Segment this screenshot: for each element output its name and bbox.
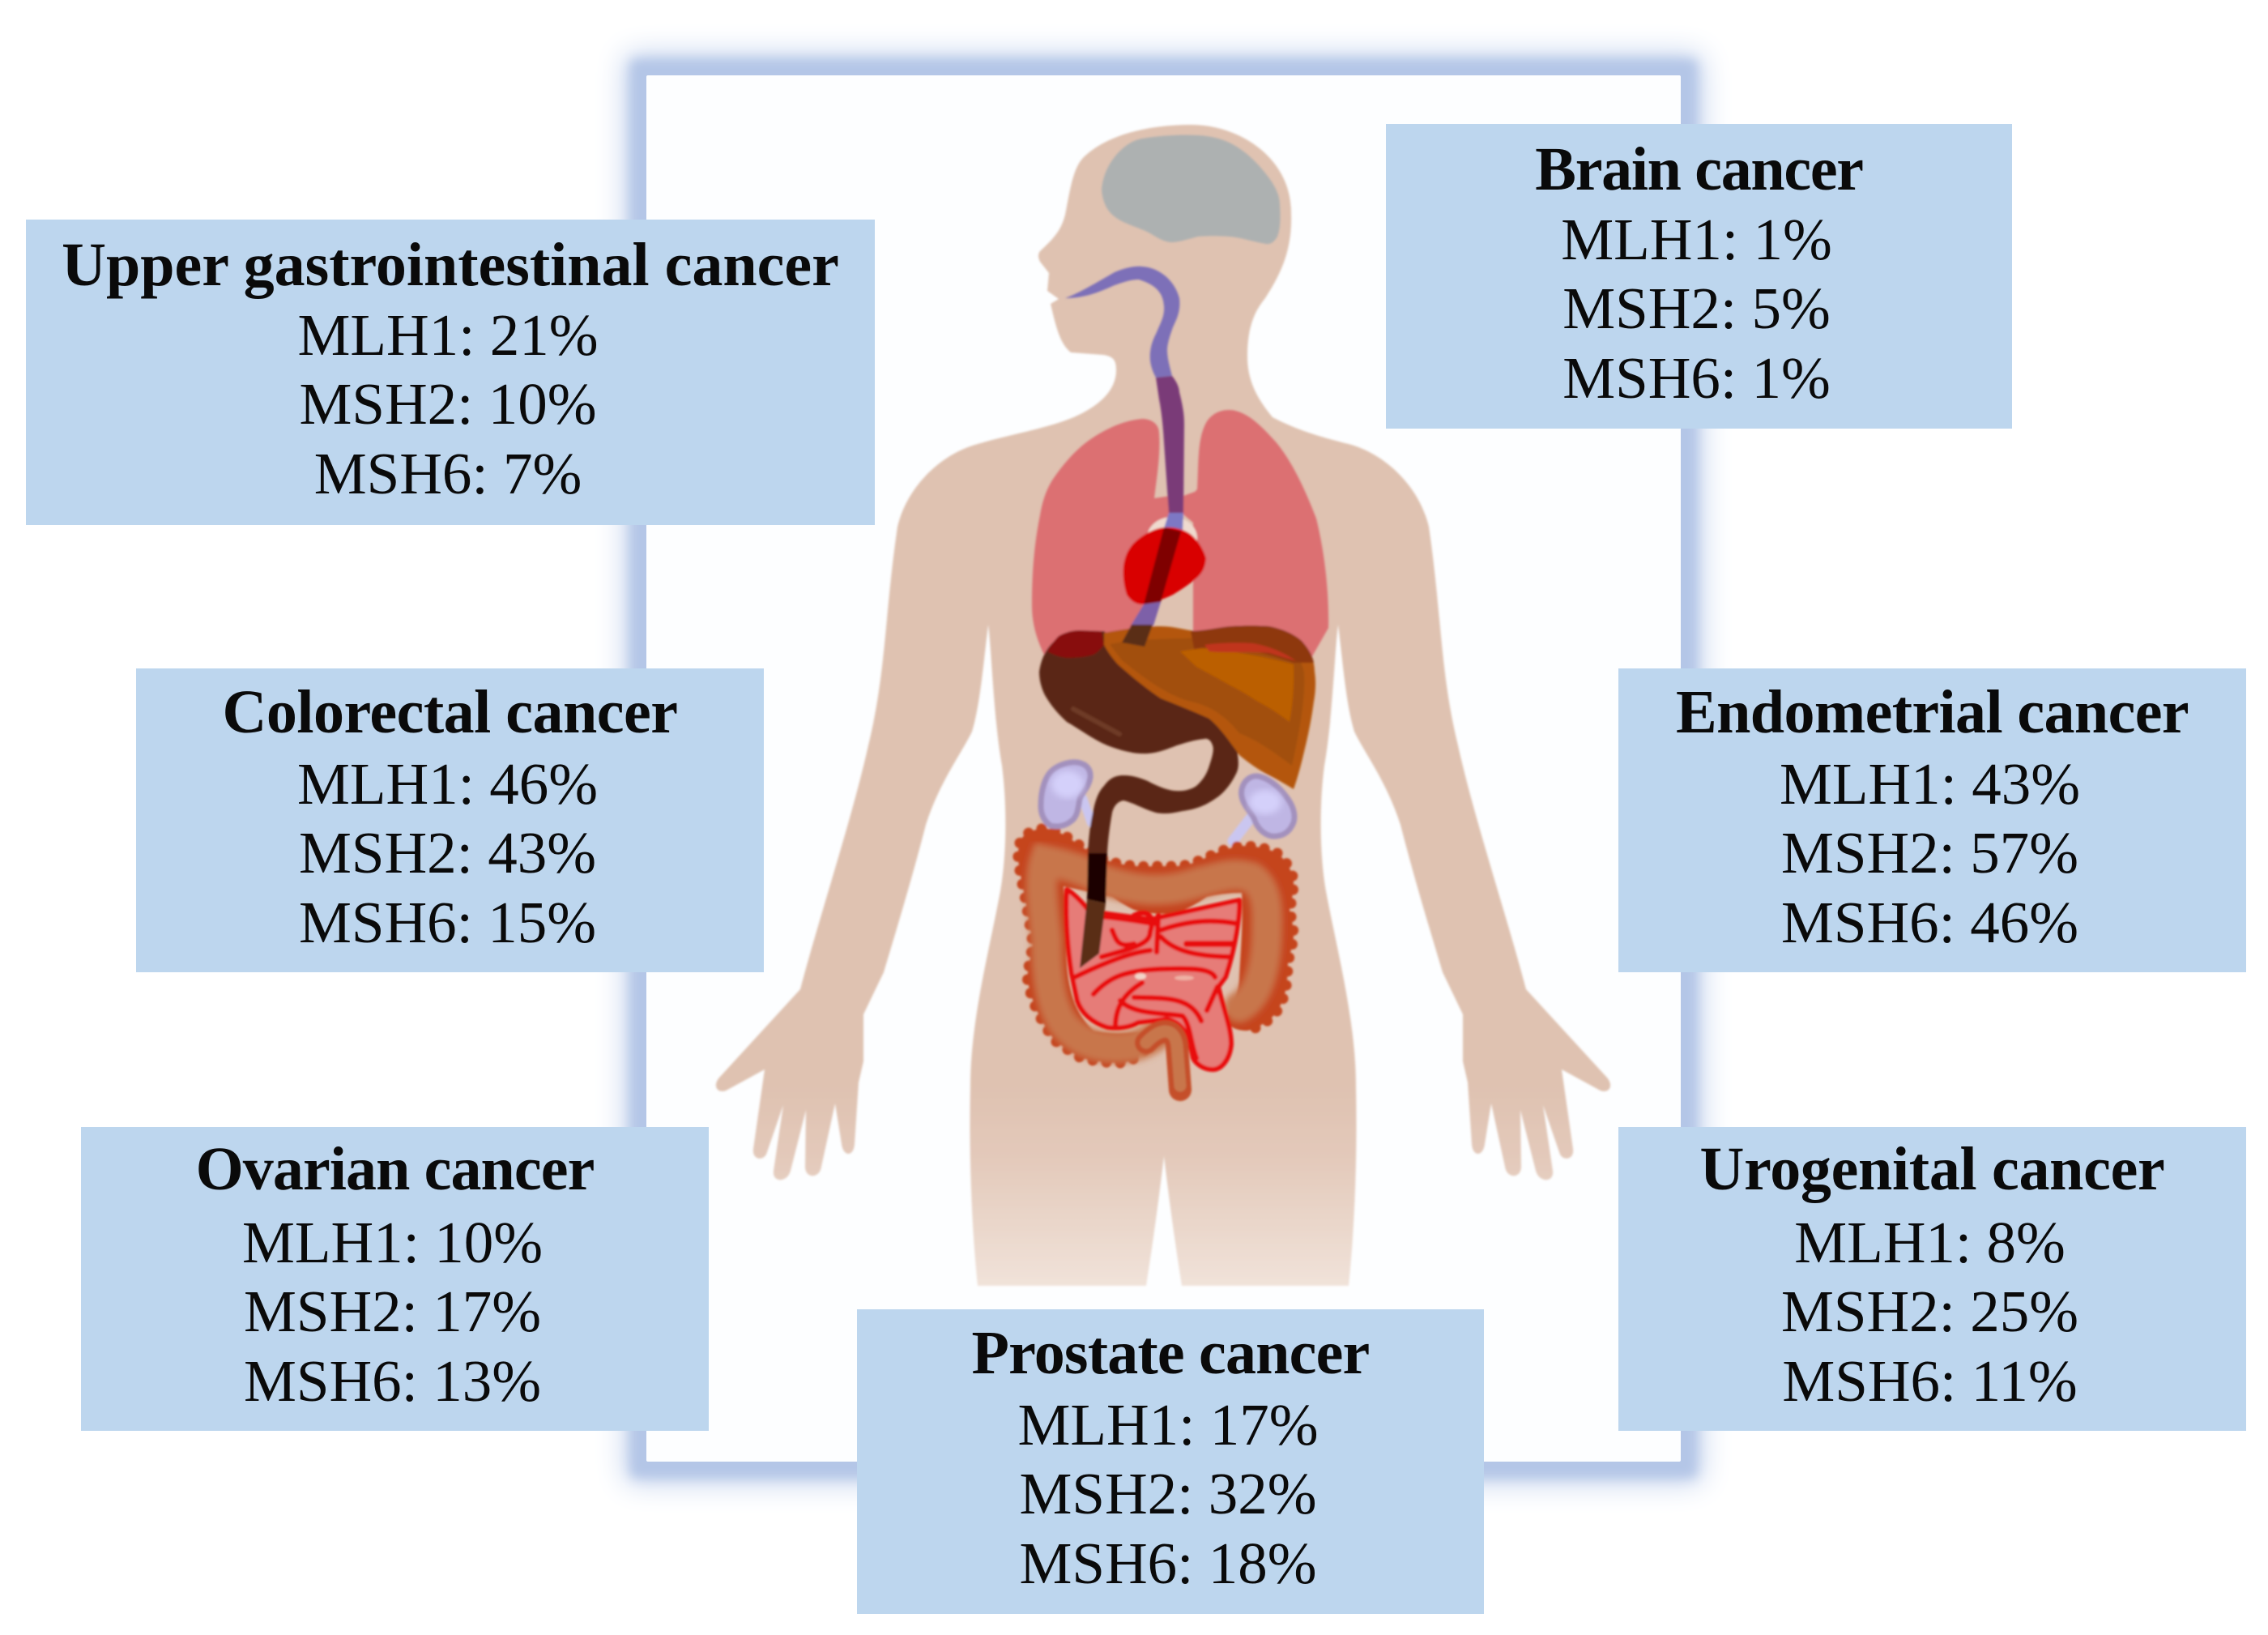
- heading: colorectal cancer: Colorectal cancer: [223, 678, 677, 746]
- esophagus lower band: [1164, 513, 1183, 531]
- text: brain cancer frequencies: MSH2: 5%: [1562, 275, 1831, 341]
- left lung: [1032, 419, 1170, 672]
- text: urogenital frequencies: [1781, 1210, 2078, 1414]
- liver: [1104, 625, 1315, 789]
- panel: endometrial cancer: [1618, 668, 2246, 972]
- liver main lobe: [1110, 636, 1304, 766]
- heading: endometrial cancer: Endometrial cancer: [1676, 678, 2189, 746]
- left kidney: [1041, 762, 1090, 826]
- panel: blue framed background: [646, 75, 1681, 1462]
- heading: urogenital cancer: Urogenital cancer: [1700, 1135, 2164, 1203]
- stomach highlight: [1073, 709, 1119, 734]
- liver top band: [1191, 625, 1314, 663]
- text: colorectal frequencies: MSH6: 15%: [299, 890, 596, 955]
- panel: urogenital cancer: [1618, 1127, 2246, 1431]
- esophagus over liver: [1122, 625, 1153, 647]
- text: upper gastrointestinal frequencies: MSH2: 10%: [299, 371, 597, 437]
- organs: [1018, 135, 1328, 1090]
- black colon section: [1087, 853, 1107, 903]
- esophagus crossing heart: [1144, 527, 1181, 604]
- text: brain cancer frequencies: MSH6: 1%: [1562, 345, 1831, 411]
- right kidney ureter: [1233, 816, 1252, 841]
- brain: [1102, 135, 1281, 244]
- text: endometrial frequencies: MSH2: 57%: [1781, 820, 2078, 886]
- liver red streak: [1204, 642, 1296, 661]
- text: urogenital frequencies: MSH6: 11%: [1782, 1348, 2078, 1414]
- text: colorectal frequencies: MLH1: 46%: [297, 751, 598, 817]
- panel: brain cancer: [1386, 124, 2012, 429]
- text: upper gastrointestinal frequencies: MSH6: 7%: [314, 441, 582, 506]
- panel: ovarian cancer: [81, 1127, 709, 1431]
- panel: prostate cancer: [857, 1309, 1484, 1614]
- text: urogenital frequencies: MLH1: 8%: [1794, 1210, 2066, 1275]
- text: ovarian frequencies: MLH1: 10%: [242, 1210, 543, 1275]
- heading: brain cancer: Brain cancer: [1535, 135, 1863, 203]
- rectum lumen: [1146, 1031, 1180, 1086]
- text: prostate frequencies: MLH1: 17%: [1017, 1392, 1319, 1458]
- heart: [1123, 527, 1206, 604]
- text: colorectal frequencies: MSH2: 43%: [299, 820, 596, 886]
- text: endometrial frequencies: MSH6: 46%: [1781, 890, 2078, 955]
- text: upper gastrointestinal frequencies: MLH1: 21%: [297, 302, 599, 368]
- text: colorectal frequencies: [297, 751, 598, 955]
- liver light region: [1180, 648, 1294, 722]
- left kidney ureter: [1083, 799, 1091, 822]
- right lung: [1183, 410, 1328, 656]
- panel: upper gastrointestinal cancer: [26, 220, 875, 525]
- text: endometrial frequencies: MLH1: 43%: [1780, 751, 2080, 817]
- text: brain cancer frequencies: [1561, 207, 1832, 411]
- heading: prostate cancer: Prostate cancer: [972, 1319, 1369, 1387]
- text: upper gastrointestinal frequencies: [297, 302, 599, 506]
- text: prostate frequencies: [1017, 1392, 1319, 1596]
- text: prostate frequencies: MSH6: 18%: [1019, 1530, 1317, 1596]
- colon lighter lumen: [1042, 860, 1267, 1048]
- text: brain cancer frequencies: MLH1: 1%: [1561, 207, 1832, 272]
- left kidney highlight: [1051, 771, 1084, 798]
- rectum outer: [1146, 1031, 1180, 1090]
- right kidney: [1242, 776, 1294, 836]
- colon haustra bumps: [1018, 829, 1294, 1063]
- esophagus over lungs: [1156, 376, 1184, 513]
- descending tube: [1080, 899, 1106, 968]
- esophagus upper: [1065, 267, 1179, 378]
- body silhouette: [716, 125, 1610, 1286]
- text: urogenital frequencies: MSH2: 25%: [1781, 1279, 2078, 1344]
- pericardium arc: [1147, 517, 1197, 559]
- text: ovarian frequencies: [242, 1210, 543, 1414]
- text: prostate frequencies: MSH2: 32%: [1019, 1461, 1317, 1526]
- text: ovarian frequencies: MSH6: 13%: [244, 1348, 541, 1414]
- heading: ovarian cancer: Ovarian cancer: [196, 1135, 594, 1203]
- stomach and duodenum: [1039, 631, 1238, 853]
- heading: upper gastrointestinal cancer: Upper gastrointestinal cancer: [62, 231, 839, 299]
- colon outer body: [1018, 829, 1294, 1063]
- right kidney highlight: [1249, 790, 1281, 814]
- small intestine: [1066, 890, 1239, 1069]
- panel: colorectal cancer: [136, 668, 764, 972]
- stomach red patch: [1047, 630, 1104, 658]
- text: ovarian frequencies: MSH2: 17%: [244, 1279, 541, 1344]
- text: endometrial frequencies: [1780, 751, 2080, 955]
- esophagus below heart: [1131, 602, 1161, 625]
